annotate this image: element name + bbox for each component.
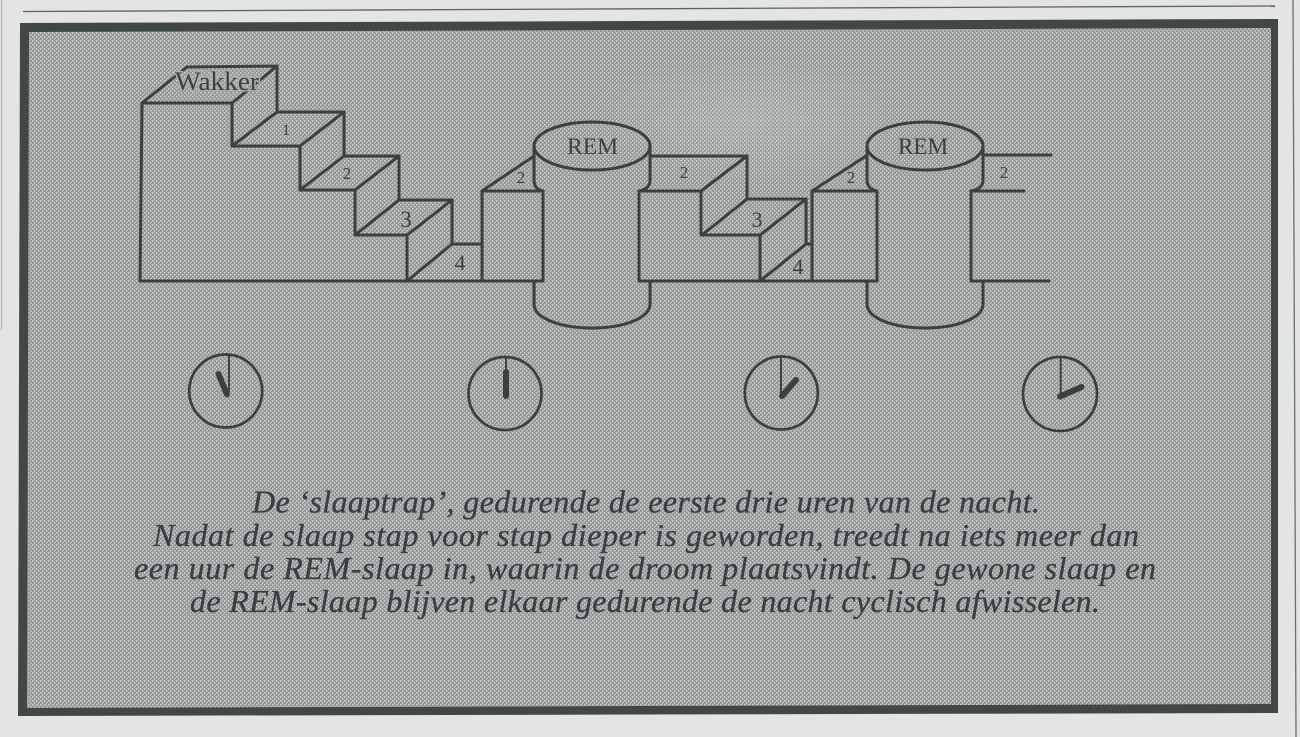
step: trailing 2 bbox=[971, 155, 1051, 191]
step: 4 second cycle: 4 bbox=[792, 254, 804, 279]
step: rising 2 second cycle: 2 bbox=[847, 168, 855, 187]
step: Wakker bbox=[140, 66, 277, 281]
step: 3 second cycle bbox=[702, 199, 806, 281]
step: rising 2: 2 bbox=[517, 168, 525, 187]
step: 4: 4 bbox=[454, 250, 466, 275]
step: Wakker: Wakker bbox=[175, 67, 259, 96]
step: 1: 1 bbox=[282, 122, 290, 139]
caption bbox=[134, 484, 1156, 619]
caption: een uur de REM-slaap in, waarin de droom plaatsvindt. De gewone slaap en bbox=[134, 550, 1156, 586]
step: rising 2 bbox=[482, 156, 543, 281]
cylinder: REM 2: REM bbox=[898, 134, 948, 159]
step: 4 bbox=[407, 244, 482, 281]
step: 2 after REM: 2 bbox=[680, 163, 688, 182]
icon: clock 1 bbox=[189, 354, 262, 428]
step: 2 after REM bbox=[639, 156, 747, 235]
diagram: sleep staircase bbox=[140, 66, 1051, 328]
top rule bbox=[23, 6, 1275, 12]
base line bbox=[140, 280, 1049, 282]
right margin rule bbox=[1293, 0, 1296, 737]
caption: de REM-slaap blijven elkaar gedurende de nacht cyclisch afwisselen. bbox=[190, 583, 1100, 619]
caption: Nadat de slaap stap voor stap dieper is geworden, treedt na iets meer dan bbox=[152, 517, 1139, 553]
step: trailing 2: 2 bbox=[1000, 163, 1008, 182]
step: 1 bbox=[232, 112, 344, 190]
icon: clock 4 bbox=[1023, 357, 1097, 431]
icon: clock 2 bbox=[468, 357, 542, 430]
step: 2 bbox=[300, 156, 399, 235]
step: 3 second cycle: 3 bbox=[752, 207, 762, 232]
caption: De ‘slaaptrap’, gedurende de eerste drie uren van de nacht. bbox=[251, 484, 1040, 520]
cylinder: REM 1 bbox=[534, 122, 650, 328]
step: 3 bbox=[355, 200, 452, 281]
step: 3: 3 bbox=[400, 207, 412, 232]
cylinder: REM 1: REM bbox=[567, 134, 618, 159]
icon: clock 3 bbox=[745, 356, 818, 430]
step: 4 second cycle bbox=[760, 244, 812, 281]
left margin rule bbox=[0, 0, 2, 330]
step: rising 2 second cycle bbox=[812, 156, 877, 281]
step: 2: 2 bbox=[343, 164, 351, 183]
cylinder: REM 2 bbox=[867, 122, 983, 328]
